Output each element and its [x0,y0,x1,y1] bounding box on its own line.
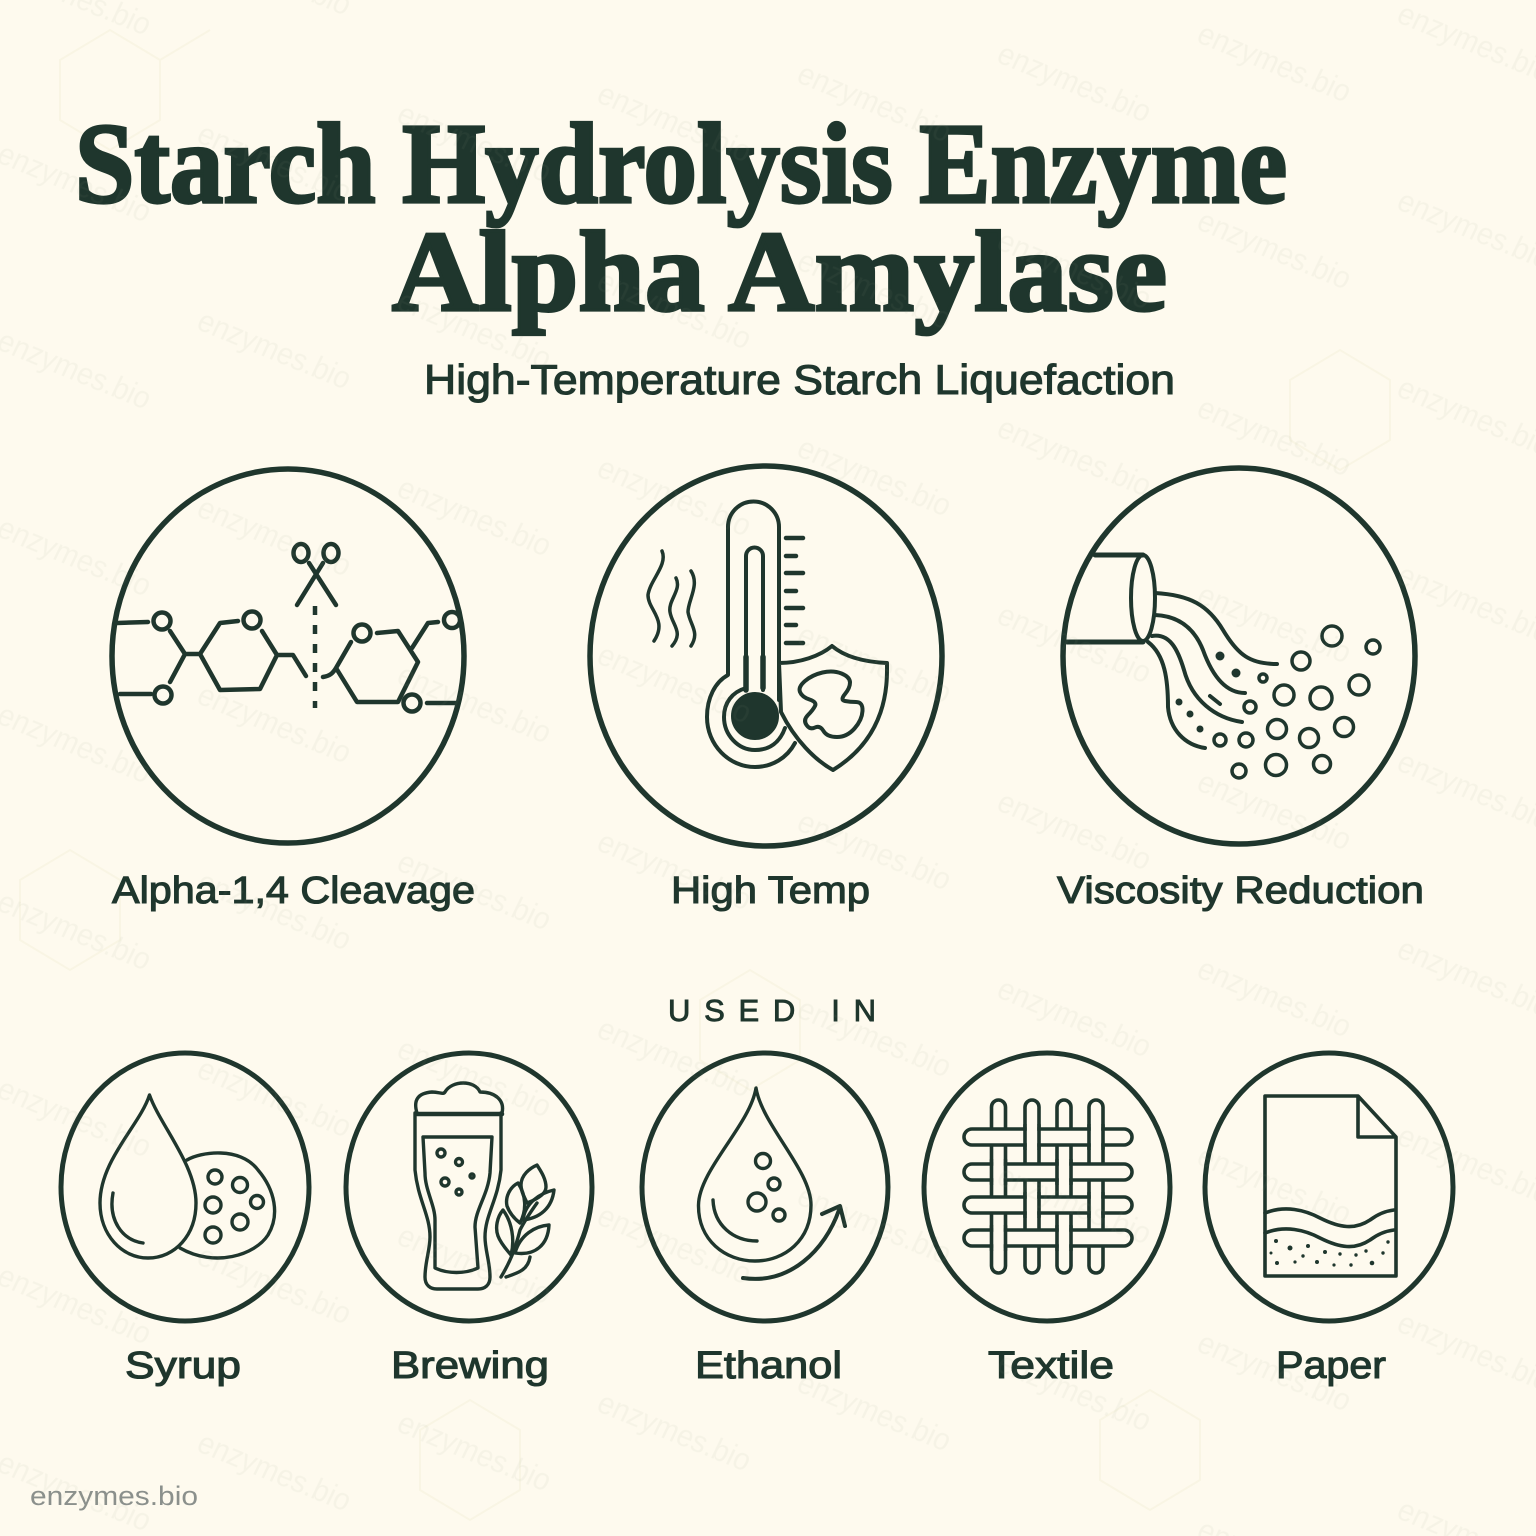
badge circle [590,466,942,846]
panel: high temp [590,466,942,912]
badge circle [112,469,464,843]
panel: textile [924,1053,1170,1387]
site credit: enzymes.bio [30,1481,198,1511]
subtitle: High-Temperature Starch Liquefaction [424,356,1175,403]
icon: pipe and flowing particles [1067,555,1380,778]
icon: beer glass and wheat [415,1083,554,1289]
panel: viscosity reduction [1057,468,1424,912]
badge circle [346,1053,592,1321]
section heading: used in: USED IN [668,993,876,1028]
title [75,100,1287,335]
panel: syrup [61,1053,309,1387]
panel: paper [1205,1053,1453,1387]
panel: ethanol [642,1053,888,1387]
icon: thermometer and shield [648,502,887,770]
badge circle [1205,1053,1453,1321]
icon: drop and starch granule [100,1095,275,1258]
icon: starch chain with scissors [117,544,460,712]
icon: drop with bubbles and arrow [698,1088,845,1279]
title: Alpha Amylase [392,208,1167,335]
label: Paper [1276,1345,1386,1387]
label: High Temp [671,870,870,912]
label: Ethanol [695,1345,842,1387]
title: Starch Hydrolysis Enzyme [75,100,1287,227]
badge circle [61,1053,309,1321]
label: Brewing [391,1345,549,1387]
label: Alpha-1,4 Cleavage [112,870,475,912]
badge circle [924,1053,1170,1321]
label: Viscosity Reduction [1057,870,1424,912]
badge circle [1063,468,1415,844]
panel: brewing [346,1053,592,1387]
label: Textile [988,1345,1114,1387]
panel: alpha-1,4 cleavage [112,469,475,912]
label: Syrup [125,1345,241,1387]
icon: paper sheet with coating [1265,1096,1396,1276]
badge circle [642,1053,888,1321]
icon: woven fabric [964,1100,1132,1273]
